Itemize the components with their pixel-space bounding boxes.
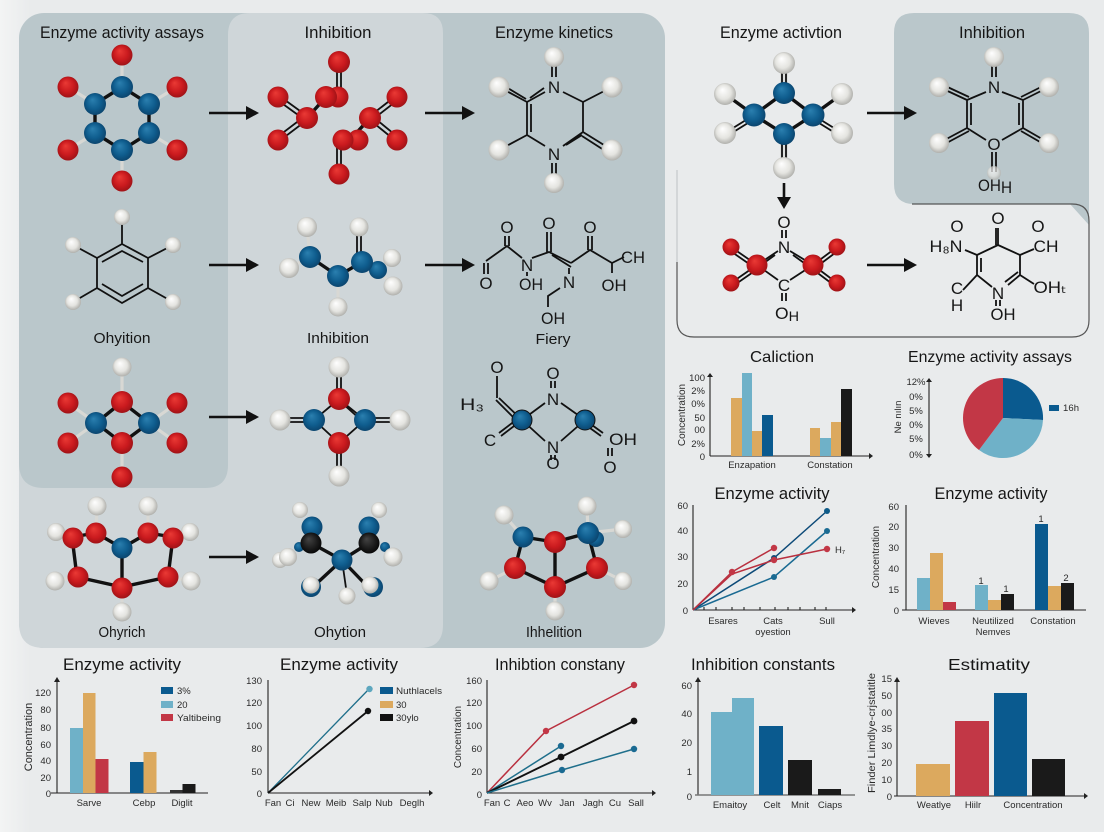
arrow [867, 106, 917, 120]
chart: inhibition constants bars: Emaitoy [713, 800, 747, 811]
molecule: red and blue diamond with atoms [58, 358, 188, 488]
molecule: peptide chain skeletal formula [479, 214, 645, 328]
chart: enzyme activity grouped bars: 2 [1063, 573, 1069, 584]
chart: inhibition constant lines: 100 [466, 721, 482, 732]
chart: caliction bars: Caliction [750, 349, 814, 366]
molecule: peptide chain skeletal formula: N [563, 273, 575, 292]
chart: estimatity bars: 20 [881, 758, 892, 769]
chart: inhibition constant lines: Jagh [583, 798, 603, 809]
molecule: skeletal structure with amine and hydroxyl: H [951, 296, 963, 315]
chart: enzyme activity grouped bars: Wieves [918, 616, 950, 627]
molecule: enzyme activation blue diamond [714, 52, 853, 179]
chart: inhibition constants bars: 1 [687, 767, 692, 778]
chart: estimatity bars: 35 [881, 724, 892, 735]
chart: enzyme activity lines: Cats [763, 616, 783, 627]
chart: enzyme activity bars with legend: Enzyme activity [63, 655, 181, 674]
molecule: red atoms with N and C [722, 213, 846, 324]
chart: estimatity bars: 50 [881, 691, 892, 702]
molecule: peptide chain skeletal formula: CH [621, 248, 645, 267]
chart: inhibition constants bars [681, 655, 855, 811]
chart: enzyme activity lines: oyestion [755, 627, 791, 638]
chart: enzyme activity grouped bars: 0 [894, 606, 899, 617]
chart: enzyme activity two lines: Deglh [400, 798, 424, 809]
molecule: peptide chain skeletal formula: OH [519, 275, 543, 294]
molecule: skeletal structure with amine and hydroxyl: H₈N [930, 237, 962, 256]
molecule: skeletal structure with amine and hydroxyl: C [951, 279, 963, 298]
molecule: blue ring with red atoms [58, 44, 188, 192]
chart: enzyme activity assays pie: 5% [909, 434, 923, 445]
chart: enzyme activity assays pie: 16h [1063, 403, 1079, 414]
molecule: top right ring with N and O: OH [978, 176, 1004, 195]
molecule: ring with formula labels: O [603, 458, 617, 477]
panel: outlined reaction box [677, 170, 1089, 337]
chart: caliction bars: 00 [694, 425, 705, 436]
arrow [209, 550, 259, 564]
chart: inhibition constants bars: Celt [764, 800, 781, 811]
molecule: pyrazine with white atoms: N [548, 145, 560, 164]
chart: enzyme activity grouped bars: Nemves [976, 627, 1011, 638]
molecule: skeletal structure with amine and hydroxyl: N [992, 284, 1004, 303]
chart: caliction bars: Constation [807, 460, 853, 471]
chart: enzyme activity bars with legend: 20 [177, 700, 188, 711]
molecule: skeletal structure with amine and hydroxyl: O [1031, 217, 1045, 236]
arrow [209, 410, 259, 424]
chart: enzyme activity assays pie: 5% [909, 406, 923, 417]
chart: caliction bars: 50 [694, 413, 705, 424]
molecule: red atoms with N and C: N [778, 238, 790, 257]
chart: enzyme activity bars with legend: Sarve [77, 798, 101, 809]
heading: enzyme activity assays: Enzyme activity assays [40, 23, 204, 42]
chart: enzyme activity two lines: 30 [396, 700, 407, 711]
chart: inhibition constant lines: 120 [466, 698, 482, 709]
molecule: ring with formula labels: OH [609, 430, 637, 449]
molecule: ring with formula labels: O [490, 358, 504, 377]
chart: enzyme activity lines: 40 [677, 526, 688, 537]
chart: estimatity bars: 00 [881, 708, 892, 719]
chart: estimatity bars: Weatlye [917, 800, 951, 811]
molecule: top right ring with N and O: H [1001, 178, 1012, 197]
chart: inhibition constant lines: 60 [471, 744, 482, 755]
chart: enzyme activity grouped bars: 1 [1003, 584, 1009, 595]
molecule: peptide chain skeletal formula: OH [602, 276, 626, 295]
molecule: ring with formula labels: N [547, 390, 559, 409]
molecule: ring with formula labels: N [547, 438, 559, 457]
chart: enzyme activity grouped bars: 1 [978, 576, 984, 587]
chart: enzyme activity grouped bars: 30 [888, 543, 899, 554]
chart: inhibition constants bars: 40 [681, 709, 692, 720]
chart: inhibition constants bars: Mnit [791, 800, 809, 811]
heading: inhibition column: Inhibition [304, 23, 372, 42]
chart: enzyme activity bars with legend: 3% [177, 686, 191, 697]
chart: enzyme activity bars with legend: Concentration [23, 703, 35, 771]
chart: estimatity bars [867, 657, 1088, 811]
chart: caliction bars [677, 349, 873, 471]
chart: enzyme activity bars with legend: 60 [40, 740, 51, 751]
molecule: top right ring with N and O [929, 47, 1059, 197]
chart: inhibition constant lines: Concentration [453, 706, 464, 768]
chart: enzyme activity lines: 0 [683, 606, 688, 617]
chart: enzyme activity bars with legend: Yaltibeing [177, 713, 221, 724]
arrow [209, 258, 259, 272]
molecule: skeletal structure with amine and hydroxyl: OH [990, 305, 1016, 324]
chart: enzyme activity two lines: Nuthlacels [396, 686, 442, 697]
chart: inhibition constants bars: Inhibition constants [691, 655, 835, 674]
arrow [209, 106, 259, 120]
chart: caliction bars: 100 [689, 373, 705, 384]
chart: enzyme activity grouped bars: 60 [888, 502, 899, 513]
chart: enzyme activity two lines: Enzyme activity [280, 655, 398, 674]
molecule: skeletal structure with amine and hydroxyl: O [991, 209, 1005, 228]
chart: enzyme activity grouped bars: Neutilized [972, 616, 1014, 627]
chart: enzyme activity lines: 60 [677, 501, 688, 512]
chart: enzyme activity two lines: 50 [251, 767, 262, 778]
panel: top right inhibition [894, 13, 1089, 225]
chart: enzyme activity bars with legend: 20 [40, 773, 51, 784]
molecule: peptide chain skeletal formula: O [583, 218, 597, 237]
molecule: ring with formula labels [460, 358, 637, 477]
chart: enzyme activity two lines: 0 [257, 789, 262, 800]
molecule: diamond with white end atoms [270, 356, 410, 486]
molecule: red oxygen clusters [268, 51, 408, 184]
chart: inhibition constant lines: 20 [471, 767, 482, 778]
chart: enzyme activity bars with legend: 40 [40, 756, 51, 767]
chart: estimatity bars: 10 [881, 775, 892, 786]
chart: estimatity bars: Estimatity [948, 657, 1030, 674]
chart: inhibition constant lines: Sall [628, 798, 644, 809]
chart: enzyme activity grouped bars: Concentration [871, 526, 882, 588]
molecule: peptide chain skeletal formula: O [500, 218, 514, 237]
molecule: red atoms with N and C: O [777, 213, 791, 232]
chart: enzyme activity grouped bars: 20 [888, 522, 899, 533]
chart: enzyme activity two lines: Meib [326, 798, 346, 809]
chart: estimatity bars: 30 [881, 741, 892, 752]
chart: enzyme activity grouped bars: 15 [888, 585, 899, 596]
chart: enzyme activity grouped bars: Constation [1030, 616, 1076, 627]
chart: enzyme activity grouped bars: 40 [888, 564, 899, 575]
chart: enzyme activity lines: 20 [677, 579, 688, 590]
caption: ohytion: Ohytion [314, 624, 366, 641]
chart: enzyme activity bars with legend: 80 [40, 705, 51, 716]
chart: inhibition constants bars: 20 [681, 738, 692, 749]
chart: enzyme activity grouped bars: 1 [1038, 514, 1044, 525]
chart: inhibition constant lines: Jan [559, 798, 575, 809]
chart: enzyme activity assays pie: Ne nılın [893, 401, 904, 433]
molecule: mixed bridged ring [480, 496, 632, 620]
caption: fiery: Fiery [536, 331, 571, 348]
chart: inhibition constant lines: 0 [477, 790, 482, 801]
molecule: branched blue chain [279, 217, 402, 316]
chart: enzyme activity lines: Sull [819, 616, 835, 627]
chart: enzyme activity assays pie: Enzyme activity assays [908, 349, 1072, 366]
molecule: skeletal structure with amine and hydroxyl [930, 209, 1066, 324]
chart: caliction bars: Concentration [677, 384, 688, 446]
molecule: skeletal structure with amine and hydroxyl: OHₜ [1034, 278, 1066, 297]
chart: inhibition constant lines: C [504, 798, 511, 809]
arrow [867, 258, 917, 272]
heading: enzyme kinetics: Enzyme kinetics [495, 23, 613, 42]
chart: enzyme activity bars with legend: Cebp [133, 798, 155, 809]
chart: enzyme activity bars with legend: 0 [46, 789, 51, 800]
molecule: pyrazine with white atoms: N [548, 78, 560, 97]
molecule: ring with formula labels: H₃ [460, 395, 484, 414]
chart: enzyme activity lines: Esares [708, 616, 738, 627]
chart: estimatity bars: Concentration [1003, 800, 1063, 811]
chart: enzyme activity assays pie: 0% [909, 420, 923, 431]
chart: enzyme activity assays pie: 0% [909, 450, 923, 461]
molecule: peptide chain skeletal formula: O [479, 274, 493, 293]
chart: enzyme activity lines: H₇ [835, 545, 845, 556]
molecule: red bridged ring [46, 496, 200, 622]
chart: inhibition constant lines: Cu [609, 798, 621, 809]
chart: enzyme activity two lines: Fan [265, 798, 281, 809]
chart: inhibition constant lines: 160 [466, 676, 482, 687]
caption: ohyrich: Ohyrich [98, 624, 146, 641]
arrow [425, 258, 475, 272]
chart: estimatity bars: 0 [887, 792, 892, 803]
chart: inhibition constant lines [453, 655, 656, 809]
chart: enzyme activity bars with legend: Diglit [171, 798, 193, 809]
molecule: peptide chain skeletal formula: O [542, 214, 556, 233]
heading: enzyme activation: Enzyme activtion [720, 23, 842, 42]
molecule: skeletal structure with amine and hydroxyl: CH [1034, 237, 1058, 256]
chart: enzyme activity two lines: 100 [246, 721, 262, 732]
chart: caliction bars: 0 [700, 452, 705, 463]
molecule: branched tetrahedral [272, 502, 402, 604]
chart: inhibition constant lines: Aeo [517, 798, 533, 809]
chart: enzyme activity two lines: 80 [251, 744, 262, 755]
molecule: ring with formula labels: O [546, 454, 560, 473]
chart: inhibition constants bars: 0 [687, 792, 692, 803]
arrow [425, 106, 475, 120]
chart: estimatity bars: Finder Limdlye-crjstatitle [867, 673, 878, 793]
chart: enzyme activity grouped bars: Enzyme activity [934, 484, 1048, 503]
chart: enzyme activity lines: 30 [677, 552, 688, 563]
molecule: peptide chain skeletal formula: N [521, 256, 533, 275]
chart: estimatity bars: 15 [881, 674, 892, 685]
molecule: ring with formula labels: C [484, 431, 496, 450]
molecule: ring with formula labels: O [546, 364, 560, 383]
molecule: red atoms with N and C: O [775, 304, 788, 323]
molecule: top right ring with N and O: O [987, 135, 1001, 154]
molecule: skeletal structure with amine and hydroxyl: O [950, 217, 964, 236]
chart: caliction bars: 2% [691, 439, 706, 450]
molecule: red atoms with N and C: C [778, 276, 790, 295]
molecule: top right ring with N and O: N [988, 78, 1000, 97]
chart: enzyme activity assays pie [893, 349, 1079, 461]
chart: enzyme activity two lines [246, 655, 442, 809]
chart: enzyme activity bars with legend: 80 [40, 723, 51, 734]
chart: enzyme activity assays pie: 12% [906, 377, 926, 388]
caption: ohyition: Ohyition [94, 330, 150, 347]
chart: caliction bars: Enzapation [728, 460, 776, 471]
caption: inhelition: Ihhelition [526, 624, 582, 641]
chart: enzyme activity lines: Enzyme activity [714, 484, 830, 503]
chart: enzyme activity lines [677, 484, 856, 638]
chart: enzyme activity two lines: New [301, 798, 321, 809]
chart: inhibition constant lines: Fan [484, 798, 500, 809]
molecule: peptide chain skeletal formula: OH [541, 309, 565, 328]
chart: enzyme activity grouped bars [871, 484, 1086, 638]
molecule: red atoms with N and C: H [789, 308, 799, 324]
panel: main molecule panels [19, 13, 665, 648]
chart: inhibition constants bars: 60 [681, 681, 692, 692]
chart: inhibition constant lines: Inhibtion constany [495, 655, 625, 674]
molecule: pyrazine with white atoms [488, 47, 622, 193]
chart: caliction bars: 0% [691, 399, 706, 410]
chart: enzyme activity two lines: Ci [286, 798, 294, 809]
chart: enzyme activity two lines: 30ylo [396, 713, 419, 724]
chart: enzyme activity two lines: 120 [246, 698, 262, 709]
chart: caliction bars: 2% [691, 386, 706, 397]
arrow: down [777, 183, 791, 209]
chart: inhibition constant lines: Wv [538, 798, 552, 809]
chart: enzyme activity two lines: Nub [375, 798, 393, 809]
chart: enzyme activity assays pie: 0% [909, 392, 923, 403]
molecule: benzene with white atoms [65, 209, 181, 310]
chart: enzyme activity bars with legend: 120 [35, 688, 51, 699]
chart: enzyme activity bars with legend [23, 655, 221, 809]
chart: enzyme activity two lines: 130 [246, 676, 262, 687]
chart: enzyme activity two lines: Salp [352, 798, 372, 809]
heading: inhibition top right: Inhibition [959, 23, 1025, 42]
caption: inhibition: Inhibition [307, 330, 369, 347]
chart: estimatity bars: Hiilr [965, 800, 981, 811]
chart: inhibition constants bars: Ciaps [818, 800, 842, 811]
